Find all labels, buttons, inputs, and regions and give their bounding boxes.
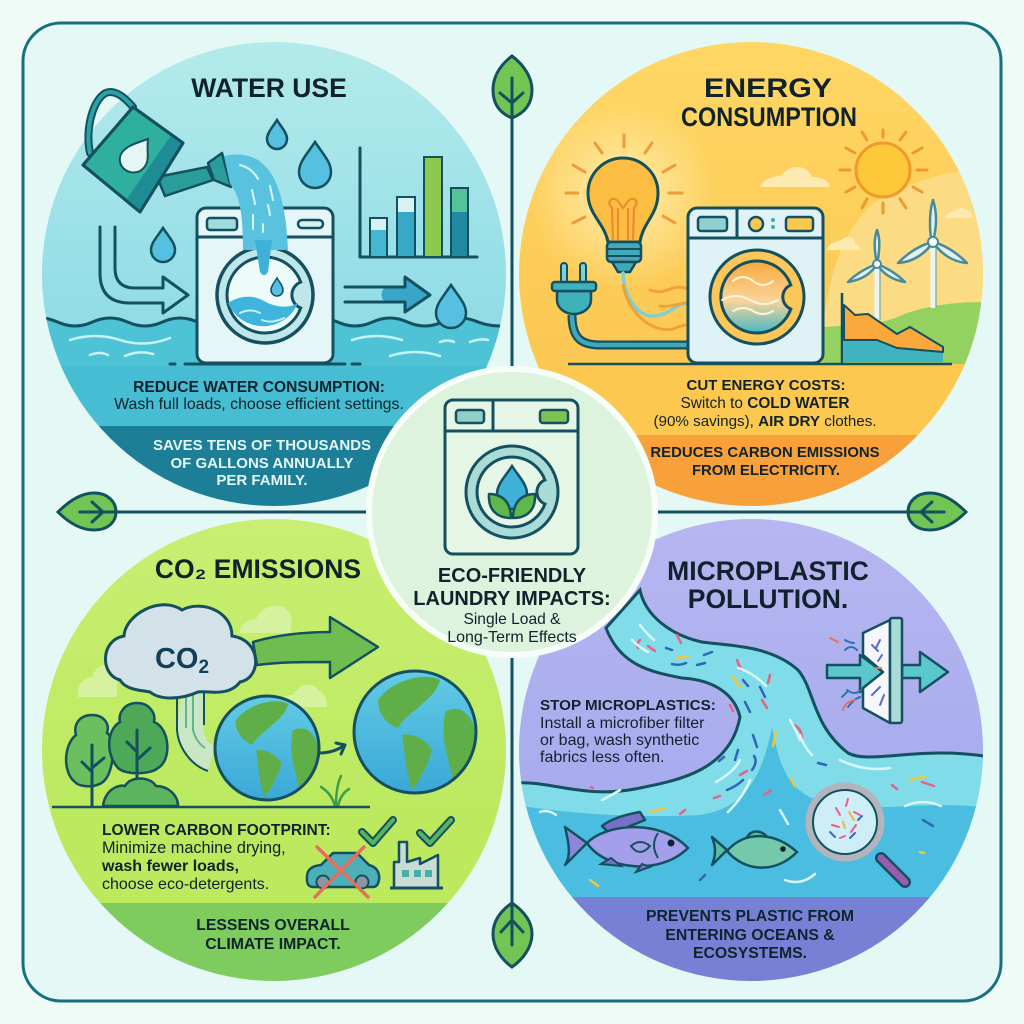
text: water savings <box>153 437 371 489</box>
icon: smoke trail <box>177 683 215 772</box>
icon: microplastic particles <box>590 635 934 886</box>
text: water savings: SAVES TENS OF THOUSANDS <box>153 437 371 454</box>
icon: light bulb <box>566 135 682 272</box>
arrow: earth to earth <box>319 743 345 754</box>
text: water savings: OF GALLONS ANNUALLY <box>170 455 354 472</box>
icon: CO2 cloud: CO <box>155 643 198 675</box>
text: carbon reduction: FROM ELECTRICITY. <box>692 463 840 479</box>
ground line <box>52 806 370 808</box>
text: climate impact: LESSENS OVERALL <box>196 917 350 934</box>
arrow: outflow <box>345 277 430 312</box>
icon: check marks <box>362 820 451 843</box>
text: lower carbon footprint: Minimize machine drying, <box>102 839 286 857</box>
heading: water use: WATER USE <box>191 73 347 103</box>
icon: magnifying glass <box>807 784 905 882</box>
heading: microplastic pollution: MICROPLASTIC <box>667 556 869 586</box>
icon: grass <box>321 776 349 806</box>
icon: earth small <box>215 696 319 800</box>
text: hub title: LAUNDRY IMPACTS: <box>413 588 611 610</box>
icon: water highlights <box>540 625 941 882</box>
text: stop microplastics: STOP MICROPLASTICS: <box>540 697 716 714</box>
text: prevents plastic: ENTERING OCEANS & <box>665 927 835 944</box>
text: stop microplastics: or bag, wash synthetic <box>540 732 699 749</box>
arrow: inflow <box>100 227 188 313</box>
text: hub title: Single Load & <box>463 611 561 628</box>
icon: microplastic filter <box>827 618 948 723</box>
icon: crossed car <box>307 847 379 897</box>
icon: green fish <box>712 831 797 868</box>
text: stop microplastics: fabrics less often. <box>540 749 664 766</box>
icon: CO2 cloud <box>105 605 256 698</box>
heading: microplastic pollution <box>667 556 869 614</box>
icon: watering can <box>83 92 231 212</box>
text: stop microplastics <box>540 697 716 766</box>
panel: CO2 emissions <box>40 518 506 985</box>
icon: washing machine <box>568 208 952 364</box>
arrow: emissions arrow <box>253 617 378 678</box>
panel: water use <box>40 40 506 508</box>
icon: sun <box>840 130 927 213</box>
icon: central washing machine <box>445 400 578 554</box>
text: reduce water consumption <box>114 379 404 413</box>
bar chart <box>360 148 477 257</box>
text: lower carbon footprint <box>101 822 331 893</box>
horizontal divider with leaves <box>58 493 966 530</box>
text: prevents plastic <box>646 908 854 962</box>
icon: washing machine <box>170 208 360 364</box>
icon: CO2 cloud: 2 <box>198 657 209 678</box>
text: stop microplastics: Install a microfiber filter <box>540 715 705 732</box>
text: cut energy costs: (90% savings), AIR DRY clothes. <box>653 413 877 430</box>
text: climate impact: CLIMATE IMPACT. <box>205 936 341 953</box>
text: hub title: Long-Term Effects <box>447 629 577 646</box>
text: lower carbon footprint: choose eco-detergents. <box>102 876 269 893</box>
icon: trees <box>66 703 178 806</box>
text: climate impact <box>196 917 350 953</box>
heading: energy consumption <box>681 73 857 132</box>
text: reduce water consumption: Wash full loads, choose efficient settings. <box>114 396 404 413</box>
text: water savings: PER FAMILY. <box>216 472 308 489</box>
panel: microplastic pollution <box>515 518 990 987</box>
text: lower carbon footprint: LOWER CARBON FOOTPRINT: <box>102 822 331 839</box>
icon: purple fish <box>565 812 688 872</box>
text: lower carbon footprint: wash fewer loads, <box>101 858 239 875</box>
vertical divider with leaves <box>493 56 532 967</box>
heading: energy consumption: ENERGY <box>704 73 832 103</box>
text: hub title <box>413 565 611 646</box>
text: hub title: ECO-FRIENDLY <box>438 565 587 587</box>
text: cut energy costs: Switch to COLD WATER <box>680 395 850 412</box>
text: cut energy costs <box>653 377 877 430</box>
chart: energy area <box>842 293 943 363</box>
icon: earth large <box>354 671 476 793</box>
text: carbon reduction: REDUCES CARBON EMISSIONS <box>650 445 880 461</box>
panel: energy consumption <box>518 40 990 508</box>
panel: center hub <box>369 369 655 655</box>
icon: factory <box>390 842 443 888</box>
text: reduce water consumption: REDUCE WATER CONSUMPTION: <box>133 379 385 396</box>
icon: power plug <box>552 263 690 345</box>
heading: CO2 emissions: CO₂ EMISSIONS <box>155 554 361 584</box>
icon: wires and heat waves <box>623 273 714 330</box>
text: carbon reduction <box>650 445 880 479</box>
icon: wind turbines <box>848 200 967 320</box>
heading: microplastic pollution: POLLUTION. <box>688 584 848 614</box>
text: prevents plastic: ECOSYSTEMS. <box>693 945 807 962</box>
icon: water stream <box>224 155 288 275</box>
text: cut energy costs: CUT ENERGY COSTS: <box>687 377 845 394</box>
heading: energy consumption: CONSUMPTION <box>681 102 857 132</box>
text: prevents plastic: PREVENTS PLASTIC FROM <box>646 908 854 925</box>
icon: water drops <box>151 120 466 328</box>
